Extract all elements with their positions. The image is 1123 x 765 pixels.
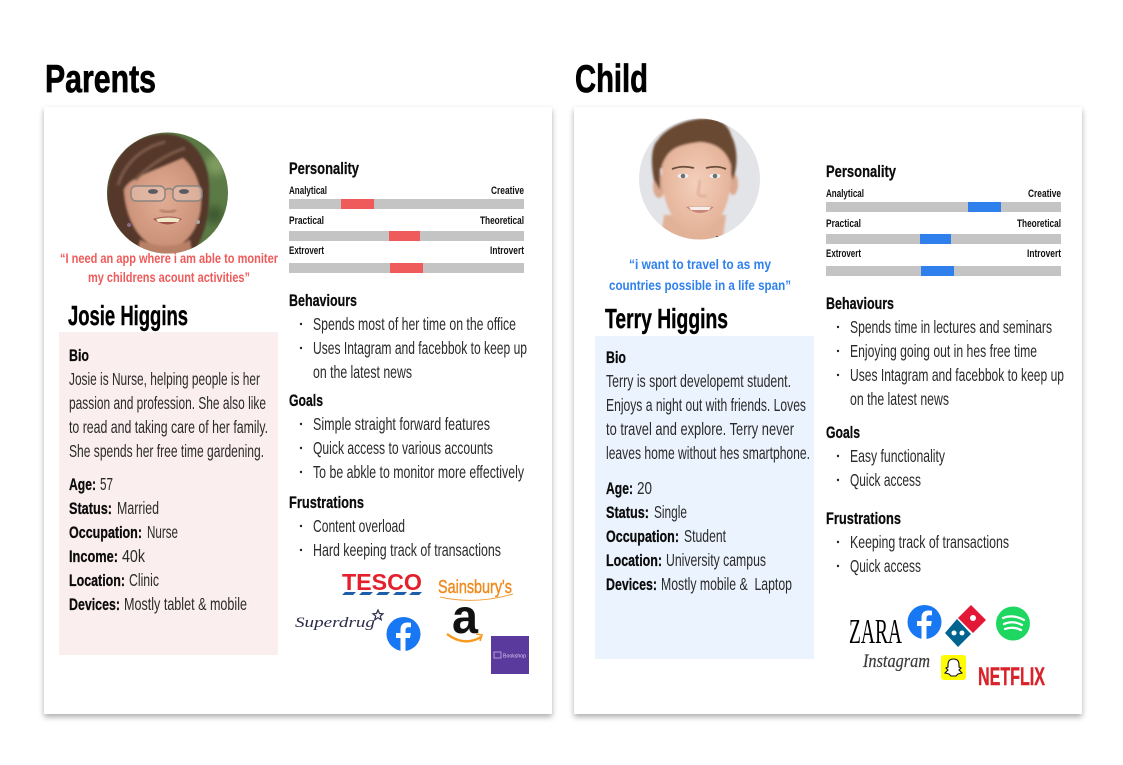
section: Josie goals: Goals — [289, 391, 323, 410]
section: Terry goals: Goals — [826, 423, 860, 442]
section: Josie personality: Practical — [289, 215, 324, 227]
panel: parents persona card — [44, 107, 552, 714]
section: Josie personality: Extrovert — [289, 245, 324, 257]
logo: Facebook — [386, 617, 420, 651]
section: Terry frustrations: Quick access — [850, 556, 921, 576]
slider: practical to theoretical — [289, 231, 524, 241]
demographics: University campus — [666, 550, 766, 570]
section: Terry goals: Quick access — [850, 470, 921, 490]
panel: Josie bio — [59, 332, 278, 655]
demographics: Student — [684, 526, 726, 546]
demographics: Income: — [69, 547, 118, 566]
hair mass — [107, 134, 209, 254]
bio text — [606, 371, 810, 463]
ears — [653, 174, 665, 198]
section: Terry goals — [826, 423, 945, 490]
slider: practical to theoretical — [826, 234, 1061, 244]
logo: Sainsbury's: Sainsbury's — [438, 577, 512, 597]
bio text: Enjoys a night out with friends. Loves — [606, 395, 806, 415]
heading: Parents: Parents — [45, 58, 156, 101]
section: Terry personality: Introvert — [1027, 248, 1061, 260]
neck — [661, 214, 727, 240]
section: Josie behaviours: Uses Intagram and facebbok to keep up — [313, 338, 527, 358]
section: Josie goals: To be abkle to monitor more effectively — [313, 462, 524, 482]
logo: Netflix: NETFLIX — [978, 663, 1045, 691]
section: Josie personality: Theoretical — [480, 215, 524, 227]
bio heading: Bio — [606, 348, 626, 367]
section: Josie personality: Creative — [491, 185, 524, 197]
section: Terry personality: Practical — [826, 218, 861, 230]
section: Terry behaviours: Behaviours — [826, 294, 894, 313]
demographics: Married — [117, 498, 159, 518]
slider: analytical to creative — [289, 199, 524, 209]
quote: Josie — [60, 250, 278, 285]
quote: Terry: countries possible in a life span” — [609, 277, 791, 293]
logo: Domino's — [945, 605, 986, 647]
bio text: to read and taking care of her family. — [69, 417, 268, 437]
fringe highlights — [118, 142, 185, 185]
bio text: to travel and explore. Terry never — [606, 419, 794, 439]
bio text: Terry is sport developemt student. — [606, 371, 791, 391]
bio heading: Bio — [69, 346, 89, 365]
demographics: 20 — [637, 478, 652, 498]
logo: Amazon: a — [452, 591, 478, 644]
logo: Instagram: Instagram — [862, 651, 930, 672]
logo: Facebook — [908, 605, 942, 639]
logo: Zara: ZARA — [849, 612, 902, 651]
demographics: Nurse — [147, 522, 178, 542]
face — [124, 158, 201, 250]
photo: Josie Higgins portrait — [107, 132, 229, 256]
section: Terry personality — [826, 162, 1061, 276]
logo: Superdrug — [295, 610, 383, 631]
section: Josie goals: Simple straight forward features — [313, 414, 490, 434]
section: Terry behaviours: Enjoying going out in hes free time — [850, 341, 1037, 361]
logo: Snapchat — [941, 655, 966, 680]
slider: extrovert to introvert — [289, 263, 524, 273]
demographics: 57 — [100, 474, 113, 494]
demographics: Location: — [69, 571, 125, 590]
demographics: 40k — [122, 546, 145, 566]
bio text: leaves home without hes smartphone. — [606, 443, 810, 463]
section: Terry frustrations: Keeping track of transactions — [850, 532, 1009, 552]
logo: Superdrug: Superdrug — [295, 615, 376, 631]
logos: Josie brands — [295, 569, 529, 674]
logos: Terry brands — [849, 605, 1045, 691]
demographics: Age: — [606, 479, 633, 498]
demographics: Status: — [69, 499, 112, 518]
logo: Tesco: TESCO — [342, 569, 422, 595]
section: Josie frustrations: Content overload — [313, 516, 405, 536]
demographics: Single — [654, 502, 687, 522]
panel: child persona card — [574, 107, 1082, 714]
demographics: Age: — [69, 475, 96, 494]
logo: Bookshop — [491, 636, 529, 674]
glasses — [131, 186, 202, 201]
bio text — [69, 369, 268, 461]
quote: Terry — [609, 256, 791, 293]
section: Terry personality: Analytical — [826, 188, 864, 200]
panel: Terry bio — [595, 336, 814, 659]
section: Josie goals: Quick access to various accounts — [313, 438, 493, 458]
section: Terry personality: Theoretical — [1017, 218, 1061, 230]
name: Josie Higgins: Josie Higgins — [68, 300, 188, 331]
section: Josie personality: Analytical — [289, 185, 327, 197]
section: Josie behaviours: Spends most of her time on the office — [313, 314, 516, 334]
demographics: Occupation: — [606, 527, 679, 546]
section: Terry personality: Creative — [1028, 188, 1061, 200]
quote: Josie: my childrens acount activities” — [88, 269, 250, 285]
section: Josie frustrations: Frustrations — [289, 493, 364, 512]
section: Josie frustrations: Hard keeping track of transactions — [313, 540, 501, 560]
demographics: Occupation: — [69, 523, 142, 542]
section: Josie frustrations — [289, 493, 501, 560]
demographics: Devices: — [69, 595, 120, 614]
demographics: Mostly mobile & Laptop — [661, 574, 792, 594]
section: Terry goals: Easy functionality — [850, 446, 945, 466]
section: Terry behaviours — [826, 294, 1064, 409]
heading: Child: Child — [575, 58, 648, 101]
demographics — [69, 474, 247, 614]
photo: Terry Higgins portrait — [639, 118, 761, 245]
section: Terry behaviours: on the latest news — [850, 389, 949, 409]
quote: Terry: “i want to travel to as my — [629, 256, 771, 272]
demographics: Clinic — [129, 570, 159, 590]
face — [662, 142, 731, 235]
bio text: passion and profession. She also like — [69, 393, 266, 413]
section: Josie goals — [289, 391, 524, 482]
slider: analytical to creative — [826, 202, 1061, 212]
bio text: Josie is Nurse, helping people is her — [69, 369, 260, 389]
demographics: Devices: — [606, 575, 657, 594]
neck — [137, 240, 192, 256]
section: Terry frustrations — [826, 509, 1009, 576]
bio text: She spends her free time gardening. — [69, 441, 264, 461]
demographics: Location: — [606, 551, 662, 570]
section: Josie personality: Personality — [289, 159, 359, 178]
section: Terry personality: Personality — [826, 162, 896, 181]
demographics: Status: — [606, 503, 649, 522]
quote: Josie: “I need an app where i am able to moniter — [60, 250, 278, 266]
section: Josie personality: Introvert — [490, 245, 524, 257]
name: Terry Higgins: Terry Higgins — [605, 303, 728, 334]
logo: Spotify — [996, 606, 1030, 640]
section: Josie personality — [289, 159, 524, 273]
hair — [652, 119, 737, 190]
slider: extrovert to introvert — [826, 266, 1061, 276]
section: Josie behaviours: on the latest news — [313, 362, 412, 382]
section: Terry frustrations: Frustrations — [826, 509, 901, 528]
section: Josie behaviours: Behaviours — [289, 291, 357, 310]
logo: Bookshop: Bookshop — [503, 654, 526, 660]
demographics: Mostly tablet & mobile — [124, 594, 247, 614]
section: Josie behaviours — [289, 291, 527, 382]
demographics — [606, 478, 792, 594]
section: Terry personality: Extrovert — [826, 248, 861, 260]
